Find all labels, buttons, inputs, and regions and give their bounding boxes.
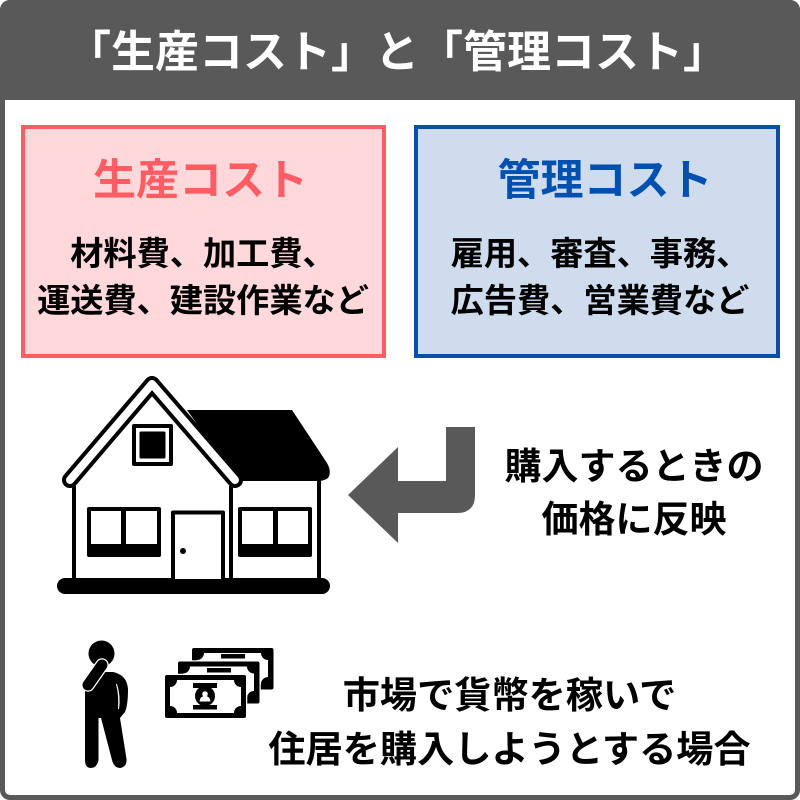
management cost items: 雇用、審査、事務、: [451, 236, 749, 273]
back note: [192, 648, 274, 690]
middle note: [178, 662, 260, 704]
reflected in price text: 価格に反映: [542, 498, 726, 540]
reflected in price text: 購入するときの: [504, 446, 764, 487]
management cost items: [451, 236, 749, 320]
walls: [74, 478, 319, 580]
production cost items: 材料費、加工費、: [70, 236, 336, 273]
market earning text: 市場で貨幣を稼いで: [343, 674, 676, 716]
management cost items: 広告費、営業費など: [451, 283, 749, 320]
right roof: [187, 410, 330, 481]
right window: [238, 507, 312, 557]
production cost items: [37, 236, 369, 320]
reflected in price text: [504, 446, 764, 540]
panel: management cost: [414, 125, 780, 358]
management cost heading: 管理コスト: [498, 157, 712, 205]
front note: [165, 675, 246, 718]
ground: [57, 578, 330, 594]
market earning text: 住居を購入しようとする場合: [268, 728, 751, 770]
market earning text: [268, 674, 751, 770]
panel: production cost: [21, 125, 386, 358]
production cost items: 運送費、建設作業など: [37, 283, 369, 320]
gable roof: [70, 384, 235, 480]
door: [173, 512, 223, 579]
attic window: [132, 424, 173, 466]
production cost heading: 生産コスト: [93, 157, 308, 205]
title bar: 「生産コスト」と「管理コスト」: [67, 28, 727, 77]
left window: [87, 507, 161, 557]
title bar: [0, 0, 800, 100]
